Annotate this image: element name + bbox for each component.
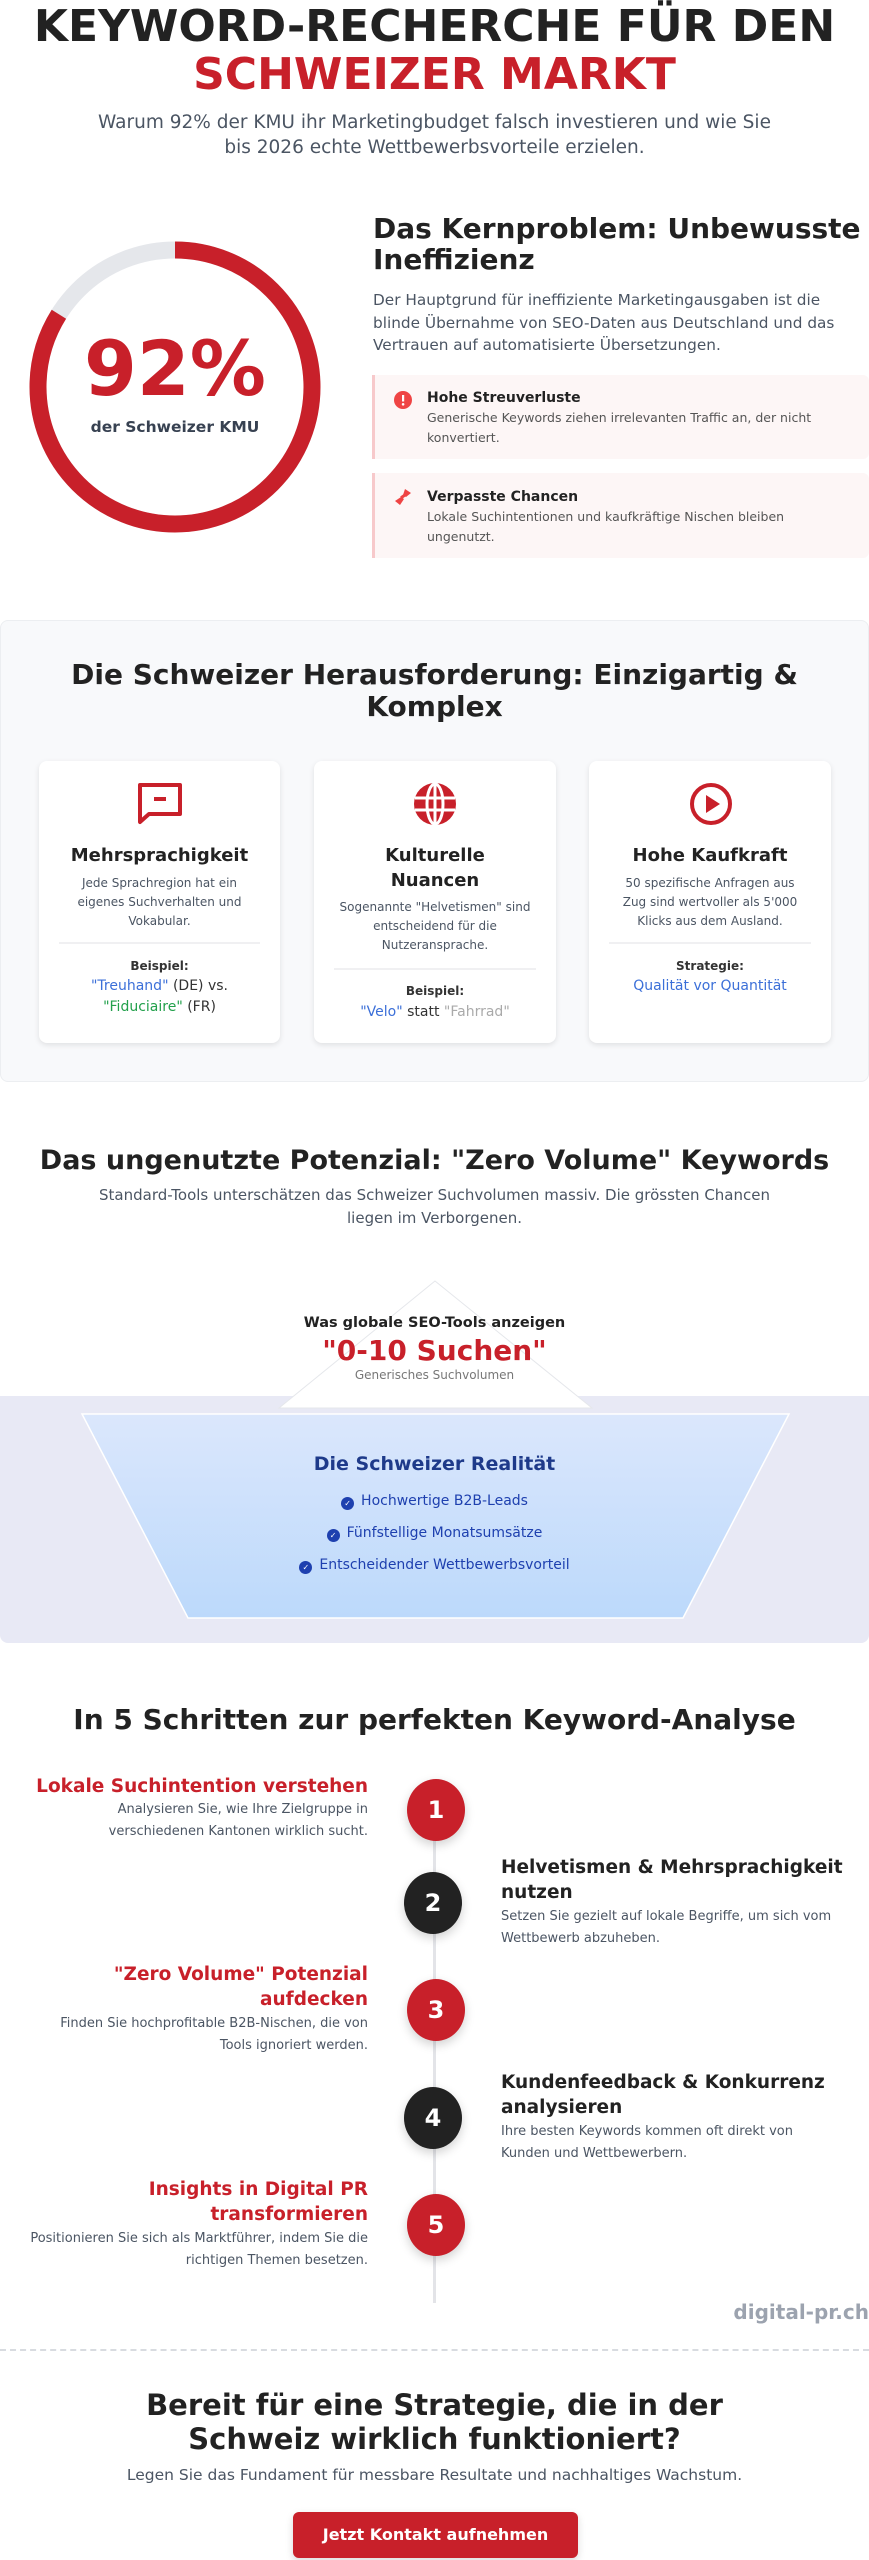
callout: Verpasste Chancen: Verpasste Chancen bbox=[427, 489, 578, 505]
step 5: Insights in Digital PR transformieren bbox=[149, 2179, 368, 2225]
step 1 bbox=[36, 1776, 469, 1849]
callout: Hohe Streuverluste: Hohe Streuverluste bbox=[427, 390, 581, 406]
step 4: Kundenfeedback & Konkurrenz analysieren bbox=[501, 2072, 825, 2118]
text: Schweizer Realität: Entscheidender Wettbewerbsvorteil bbox=[319, 1557, 570, 1573]
step 2: Helvetismen & Mehrsprachigkeit nutzen bbox=[501, 1857, 843, 1903]
icon: speech bubble bbox=[138, 783, 182, 824]
card: Kulturelle Nuancen: "Velo" statt "Fahrrad" bbox=[360, 1004, 510, 1020]
callout: Hohe Streuverluste: Generische Keywords ziehen irrelevanten Traffic an, der nicht konvertiert. bbox=[427, 410, 811, 445]
step 1: Lokale Suchintention verstehen bbox=[36, 1776, 368, 1797]
card: Mehrsprachigkeit: Mehrsprachigkeit bbox=[71, 845, 248, 866]
title: KEYWORD-RECHERCHE FÜR DEN bbox=[34, 1, 835, 52]
step 1: 1 bbox=[428, 1796, 444, 1824]
timeline line bbox=[433, 1810, 436, 2303]
card: Hohe Kaufkraft: 50 spezifische Anfragen aus Zug sind wertvoller als 5'000 Klicks aus dem Ausland. bbox=[623, 876, 797, 928]
title: SCHWEIZER MARKT bbox=[193, 49, 676, 100]
text: Schweizer Realität: ✓ bbox=[330, 1531, 336, 1540]
heading: CTA: Bereit für eine Strategie, die in der bbox=[146, 2388, 723, 2422]
subtitle: Warum 92% der KMU ihr Marketingbudget falsch investieren und wie Sie bbox=[98, 112, 771, 133]
text: Schweizer Realität: Fünfstellige Monatsumsätze bbox=[347, 1525, 542, 1541]
text: Kernproblem: Der Hauptgrund für ineffiziente Marketingausgaben ist die blinde Übernahme von SEO-Daten aus Deutschland und das Vertrauen auf automatisierte Übersetzungen. bbox=[373, 291, 834, 354]
heading: Kernproblem: Ineffizienz bbox=[373, 243, 535, 276]
text: tip of iceberg: Was globale SEO-Tools anzeigen bbox=[304, 1315, 565, 1331]
donut chart: 92%: 92% bbox=[84, 324, 266, 413]
heading: CTA bbox=[146, 2388, 723, 2456]
step 2: Setzen Sie gezielt auf lokale Begriffe, um sich vom Wettbewerb abzuheben. bbox=[501, 1909, 831, 1946]
card: Kulturelle Nuancen bbox=[314, 761, 556, 1043]
card: Mehrsprachigkeit: "Treuhand" (DE) vs. bbox=[91, 978, 228, 994]
text: CTA: Legen Sie das Fundament für messbare Resultate und nachhaltiges Wachstum. bbox=[127, 2466, 742, 2484]
step 4: Ihre besten Keywords kommen oft direkt von Kunden und Wettbewerbern. bbox=[501, 2124, 793, 2161]
card: Kulturelle Nuancen: Kulturelle bbox=[385, 845, 485, 866]
card: Hohe Kaufkraft: Qualität vor Quantität bbox=[633, 978, 787, 994]
icon: play circle bbox=[690, 783, 732, 825]
panel: Schweizer Herausforderung bbox=[0, 620, 869, 1082]
step 3: Finden Sie hochprofitable B2B-Nischen, die von Tools ignoriert werden. bbox=[60, 2016, 368, 2053]
subtitle bbox=[98, 112, 771, 158]
heading: CTA: Schweiz wirklich funktioniert? bbox=[188, 2422, 681, 2456]
card: Mehrsprachigkeit: Beispiel: bbox=[130, 959, 189, 973]
step 5: Positionieren Sie sich als Marktführer, indem Sie die richtigen Themen besetzen. bbox=[30, 2231, 368, 2268]
heading: Zero Volume: Das ungenutzte Potenzial: "Zero Volume" Keywords bbox=[40, 1145, 829, 1176]
step 5 bbox=[30, 2179, 469, 2268]
card: Hohe Kaufkraft bbox=[589, 761, 831, 1043]
text: Schweizer Realität: Die Schweizer Realität bbox=[314, 1453, 555, 1475]
step 2: 2 bbox=[425, 1889, 441, 1917]
step 2 bbox=[400, 1857, 843, 1946]
icon: globe bbox=[414, 783, 456, 825]
button: Kontakt: Jetzt Kontakt aufnehmen bbox=[323, 2525, 548, 2544]
donut chart: 92%: der Schweizer KMU bbox=[91, 418, 259, 436]
heading: Kernproblem bbox=[373, 212, 861, 276]
card: Mehrsprachigkeit: Jede Sprachregion hat ein eigenes Suchverhalten und Vokabular. bbox=[77, 876, 242, 928]
heading bbox=[71, 658, 798, 723]
step 4 bbox=[400, 2072, 825, 2161]
card: Kulturelle Nuancen: Sogenannte "Helvetismen" sind entscheidend für die Nutzeransprache. bbox=[340, 900, 530, 952]
heading: Komplex bbox=[366, 690, 503, 723]
subtitle: bis 2026 echte Wettbewerbsvorteile erzielen. bbox=[224, 137, 645, 158]
step 4: 4 bbox=[425, 2104, 441, 2132]
callout: Hohe Streuverluste bbox=[372, 375, 869, 459]
title bbox=[34, 0, 835, 100]
text: tip of iceberg bbox=[304, 1315, 565, 1382]
callout: Verpasste Chancen: Lokale Suchintentionen und kaufkräftige Nischen bleiben ungenutzt. bbox=[427, 509, 784, 544]
step 3 bbox=[60, 1964, 469, 2053]
panel: iceberg bbox=[0, 1396, 869, 1643]
heading: Kernproblem: Das Kernproblem: Unbewusste bbox=[373, 212, 861, 245]
step 3: "Zero Volume" Potenzial aufdecken bbox=[114, 1964, 368, 2010]
text: Zero Volume subtitle: Standard-Tools unterschätzen das Schweizer Suchvolumen massiv. Die grössten Chancen liegen im Verborgenen. bbox=[99, 1186, 770, 1227]
text: Schweizer Realität bbox=[299, 1453, 570, 1574]
chart: iceberg shapes bbox=[81, 1280, 790, 1619]
card: Mehrsprachigkeit bbox=[39, 761, 280, 1043]
card: Hohe Kaufkraft: Strategie: bbox=[676, 959, 744, 973]
text: Schweizer Realität: Hochwertige B2B-Leads bbox=[361, 1493, 528, 1509]
brand: digital-pr.ch: digital-pr.ch bbox=[733, 2300, 869, 2324]
text: tip of iceberg: Generisches Suchvolumen bbox=[355, 1368, 514, 1382]
card: Hohe Kaufkraft: Hohe Kaufkraft bbox=[633, 845, 787, 866]
button: Kontakt bbox=[293, 2512, 578, 2558]
text: Schweizer Realität: ✓ bbox=[302, 1563, 309, 1572]
icon: broken link bbox=[395, 489, 411, 505]
step 3: 3 bbox=[428, 1996, 444, 2024]
step 5: 5 bbox=[428, 2211, 444, 2239]
text: tip of iceberg: "0-10 Suchen" bbox=[322, 1334, 547, 1367]
card: Kulturelle Nuancen: Beispiel: bbox=[406, 984, 464, 998]
card: Mehrsprachigkeit: "Fiduciaire" (FR) bbox=[103, 999, 216, 1015]
step 1: Analysieren Sie, wie Ihre Zielgruppe in verschiedenen Kantonen wirklich sucht. bbox=[109, 1802, 368, 1839]
callout: Verpasste Chancen bbox=[372, 473, 869, 558]
icon: warning bbox=[394, 391, 412, 409]
donut chart: 92% bbox=[30, 242, 320, 532]
card: Kulturelle Nuancen: Nuancen bbox=[391, 870, 479, 891]
text: Schweizer Realität: ✓ bbox=[344, 1499, 351, 1508]
heading: 5 Schritte: In 5 Schritten zur perfekten Keyword-Analyse bbox=[73, 1703, 796, 1736]
heading: Die Schweizer Herausforderung: Einzigartig & bbox=[71, 658, 798, 691]
